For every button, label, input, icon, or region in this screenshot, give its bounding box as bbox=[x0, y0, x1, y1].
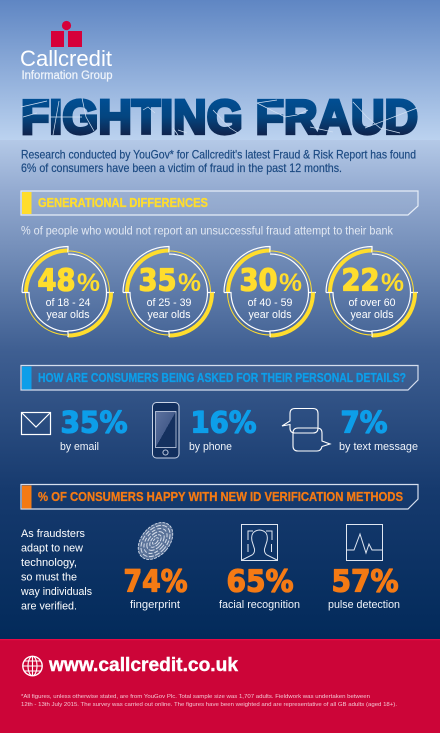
text block: as fraudsters adapt bbox=[20, 528, 92, 612]
stat: 35% of 25-39 year olds: 35 bbox=[138, 264, 176, 298]
intro text bbox=[21, 148, 416, 175]
stat: 74% fingerprint: fingerprint bbox=[130, 599, 180, 611]
section heading bar: % OF CONSUMERS HAPPY WITH NEW ID VERIFICATION METHODS bbox=[38, 490, 403, 504]
icon: pulse detection bbox=[346, 524, 382, 560]
stat: 57% pulse detection bbox=[328, 564, 400, 611]
stat: 30% of 40-59 year olds: 30 bbox=[240, 264, 278, 298]
stat: 48% of 18-24 year olds: year olds bbox=[46, 309, 90, 321]
section heading bar bbox=[21, 191, 418, 215]
stat: 7% by text message: by text message bbox=[339, 441, 418, 453]
stat: 74% fingerprint bbox=[124, 564, 188, 611]
icon: logo mark bbox=[51, 21, 82, 47]
text block: as fraudsters adapt: adapt to new bbox=[21, 542, 83, 554]
stat: 30% of 40-59 year olds: % bbox=[279, 269, 302, 297]
icon: envelope bbox=[22, 412, 50, 434]
intro text: 6% of consumers have been a victim of fraud in the past 12 months. bbox=[21, 161, 342, 175]
stat: 48% of 18-24 year olds: % bbox=[77, 269, 100, 297]
stat: 35% by email: by email bbox=[60, 441, 99, 453]
stat: 30% of 40-59 year olds: of 40 - 59 bbox=[248, 297, 292, 309]
stat: 22% of over 60 year olds bbox=[326, 246, 418, 337]
stat: 22% of over 60 year olds: 22 bbox=[342, 264, 380, 298]
stat: 35% of 25-39 year olds bbox=[123, 246, 215, 337]
panel: footer bbox=[0, 639, 440, 733]
stat: 48% of 18-24 year olds: of 18 - 24 bbox=[46, 297, 90, 309]
stat: 65% facial recognition bbox=[219, 564, 300, 611]
stat: 16% by phone: by phone bbox=[189, 441, 232, 453]
text block: as fraudsters adapt: As fraudsters bbox=[21, 528, 85, 540]
website url: www.callcredit.co.uk bbox=[48, 654, 238, 676]
stat: 7% by text message bbox=[339, 406, 418, 453]
text block: as fraudsters adapt: are verified. bbox=[21, 600, 77, 612]
stat: 35% of 25-39 year olds: year olds bbox=[148, 309, 190, 321]
stat: 35% by email bbox=[60, 406, 128, 453]
footnote: 12th - 13th July 2015. The survey was carried out online. The figures have been weighted and are representative of all GB adults (aged 18+). bbox=[21, 702, 397, 708]
stat: 35% of 25-39 year olds: % bbox=[178, 269, 201, 297]
text block: as fraudsters adapt: way individuals bbox=[20, 586, 92, 598]
stat: 65% facial recognition: 65% bbox=[226, 564, 294, 600]
footnote bbox=[21, 694, 397, 708]
panel: generational differences bbox=[21, 191, 418, 337]
stat: 35% of 25-39 year olds: of 25 - 39 bbox=[147, 297, 191, 309]
panel: ID verification methods bbox=[20, 484, 418, 612]
stat: 57% pulse detection: pulse detection bbox=[328, 599, 400, 611]
text block: as fraudsters adapt: technology, bbox=[21, 557, 77, 569]
footnote: *All figures, unless otherwise stated, are from YouGov Plc. Total sample size was 1,707 adults. Fieldwork was undertaken between bbox=[21, 694, 370, 700]
icon: fingerprint bbox=[131, 516, 180, 566]
section heading bar bbox=[21, 366, 418, 390]
stat: 48% of 18-24 year olds bbox=[22, 246, 114, 337]
subheading: % of people who would not report an unsuccessful fraud attempt to their bank bbox=[21, 224, 393, 238]
stat: 57% pulse detection: 57% bbox=[332, 564, 398, 600]
logo subtitle: Information Group bbox=[22, 70, 112, 82]
stat: 48% of 18-24 year olds: 48 bbox=[38, 264, 76, 298]
icon: globe bbox=[23, 656, 42, 676]
stat: 74% fingerprint: 74% bbox=[124, 564, 188, 600]
stat: 16% by phone: 16% bbox=[190, 406, 256, 440]
stat: 22% of over 60 year olds: year olds bbox=[350, 309, 394, 321]
stat: 16% by phone bbox=[189, 406, 256, 453]
stat: 30% of 40-59 year olds: year olds bbox=[248, 309, 292, 321]
stat: 7% by text message: 7% bbox=[340, 406, 388, 440]
panel: how consumers are asked bbox=[21, 366, 418, 458]
stat: 22% of over 60 year olds: of over 60 bbox=[348, 297, 396, 309]
title: FIGHTING FRAUD bbox=[21, 92, 418, 144]
icon: speech bubbles bbox=[282, 408, 330, 451]
icon: phone bbox=[152, 402, 179, 458]
stat: 65% facial recognition: facial recognition bbox=[219, 599, 300, 611]
logo name: Callcredit bbox=[20, 46, 112, 71]
section heading bar: GENERATIONAL DIFFERENCES bbox=[38, 196, 208, 210]
icon: facial recognition bbox=[242, 524, 278, 560]
logo: Callcredit Information Group bbox=[20, 21, 112, 82]
text block: as fraudsters adapt: so must the bbox=[21, 572, 77, 584]
stat: 22% of over 60 year olds: % bbox=[381, 269, 404, 297]
stat: 35% by email: 35% bbox=[60, 406, 128, 440]
stat: 30% of 40-59 year olds bbox=[224, 246, 316, 337]
section heading bar bbox=[21, 484, 418, 509]
